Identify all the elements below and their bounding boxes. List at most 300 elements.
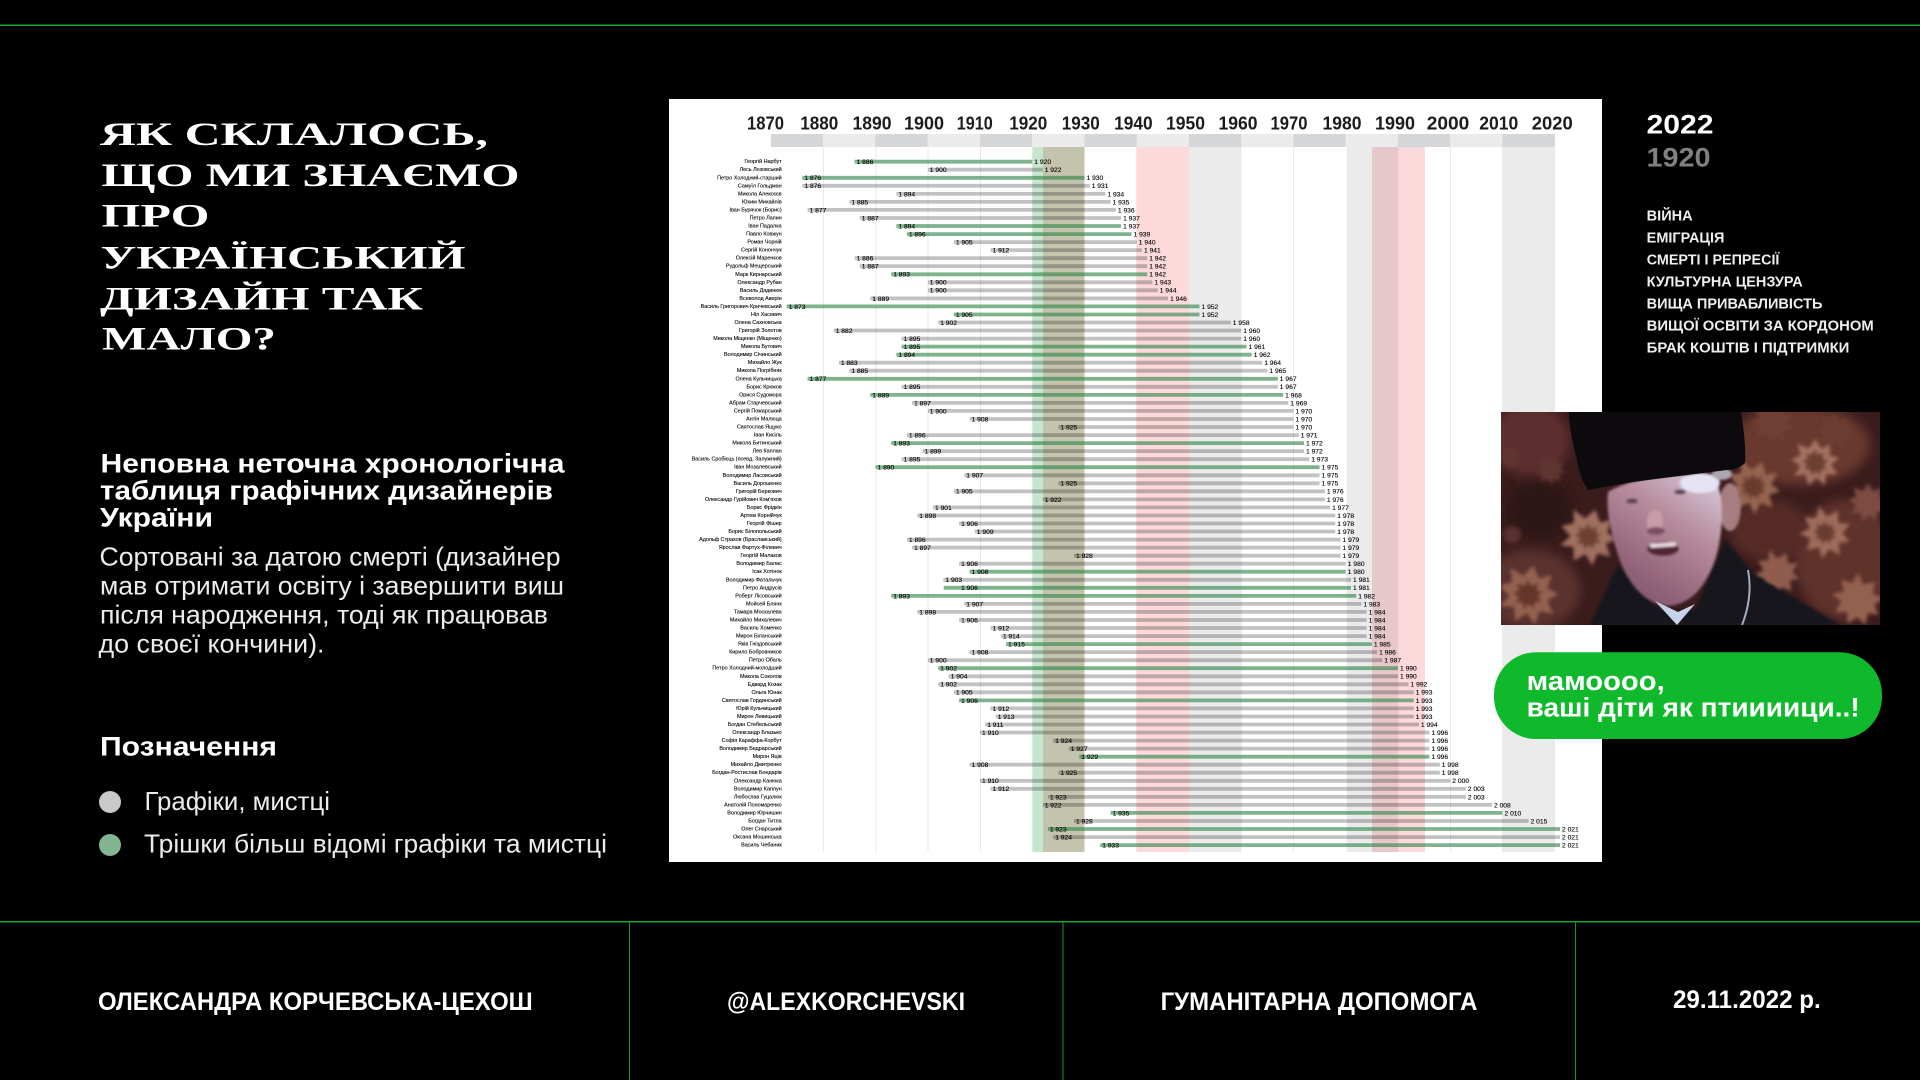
timeline rows: 1 906: [961, 561, 978, 568]
timeline rows: 1 902: [940, 666, 957, 673]
decade labels: 1920: [1009, 113, 1047, 134]
timeline rows: Іван Бурячок (Борис): [730, 207, 782, 213]
timeline rows: Святослав Гординський: [722, 697, 782, 704]
timeline rows: 1 970: [1296, 424, 1313, 431]
timeline rows: Олексій Маренков: [736, 255, 782, 262]
timeline rows: 1 903: [945, 577, 962, 584]
timeline rows: 1 973: [1311, 457, 1328, 464]
timeline rows: 1 924: [1055, 738, 1072, 745]
timeline rows: 1 931: [1092, 183, 1109, 190]
timeline rows: Юрій Кульчицький: [736, 705, 782, 712]
title: [100, 117, 520, 357]
timeline rows: Михайло Жук: [748, 359, 782, 366]
decade labels: 1900: [904, 113, 944, 134]
timeline rows: 2 010: [1504, 810, 1522, 817]
timeline rows: 1 905: [956, 312, 973, 319]
timeline rows: 2 003: [1468, 794, 1485, 801]
period band: 1980-1985: [1347, 147, 1372, 852]
timeline rows: 1 923: [1050, 794, 1067, 801]
photo: hat: [1569, 412, 1745, 490]
timeline rows: Орися Судомора: [739, 392, 782, 398]
timeline rows: 1 906: [961, 617, 978, 624]
timeline rows: 1 902: [940, 682, 957, 689]
chart panel: timeline of designers: [669, 99, 1602, 862]
timeline rows: Михайло Дмитренко: [731, 761, 782, 768]
legend: [99, 732, 607, 859]
timeline rows: Лев Каплан: [753, 449, 782, 455]
timeline rows: 1 985: [1374, 641, 1391, 648]
description text: [98, 542, 564, 659]
timeline rows: Святослав Ящуко: [737, 424, 782, 430]
timeline rows: 1 994: [1421, 722, 1438, 729]
list of causes: КУЛЬТУРНА ЦЕНЗУРА: [1647, 275, 1803, 291]
timeline rows: Богдан-Ростислав Бондарів: [712, 770, 782, 776]
timeline rows: 2 021: [1562, 826, 1579, 833]
timeline rows: 1 979: [1342, 545, 1360, 552]
timeline rows: 1 993: [1416, 706, 1433, 713]
timeline rows: 1 964: [1264, 360, 1281, 367]
timeline rows: 1 970: [1296, 416, 1313, 423]
timeline rows: 1 906: [961, 585, 978, 592]
timeline rows: 2 015: [1531, 818, 1548, 825]
timeline rows: 1 914: [1003, 633, 1020, 640]
timeline rows: 1 992: [1410, 682, 1428, 689]
timeline rows: 1 907: [966, 601, 983, 608]
title: МАЛО?: [102, 321, 276, 357]
timeline rows: Борис Фрідкін: [747, 505, 782, 511]
timeline rows: Петро Обаль: [749, 658, 782, 664]
timeline rows: Кирило Бобровников: [729, 650, 782, 656]
timeline rows: 1 876: [804, 183, 821, 190]
timeline rows: 1 978: [1337, 529, 1354, 536]
timeline rows: Микола Погрібняк: [737, 368, 782, 374]
timeline rows: 1 934: [1107, 191, 1124, 198]
timeline rows: 1 978: [1337, 513, 1354, 520]
subtitle heading: України: [100, 503, 213, 533]
timeline rows: 1 933: [1102, 842, 1119, 849]
timeline rows: 1 984: [1369, 617, 1386, 624]
decade labels: 2020: [1532, 113, 1573, 134]
footer: author: ОЛЕКСАНДРА КОРЧЕВСЬКА-ЦЕХОШ: [98, 988, 533, 1016]
timeline rows: Володимир Юрчишин: [727, 810, 782, 816]
timeline rows: 1 967: [1280, 384, 1297, 391]
timeline rows: Олександр Гурійович Ком'яхов: [705, 496, 782, 503]
timeline rows: 1 887: [862, 215, 879, 222]
timeline rows: 1 913: [998, 714, 1015, 721]
timeline rows: 1 981: [1353, 577, 1370, 584]
timeline rows: 1 958: [1233, 320, 1250, 327]
timeline rows: 1 980: [1348, 561, 1365, 568]
timeline rows: 1 912: [992, 625, 1010, 632]
footer: date: 29.11.2022 р.: [1673, 986, 1821, 1014]
timeline rows: 1 984: [1369, 609, 1386, 616]
timeline rows: 1 982: [1358, 593, 1375, 600]
timeline rows: 1 907: [966, 473, 983, 480]
timeline rows: 1 923: [1050, 826, 1067, 833]
timeline rows: 1 952: [1202, 304, 1219, 311]
timeline rows: 1 908: [972, 416, 989, 423]
list of causes: [1647, 207, 1874, 357]
timeline rows: 1 996: [1431, 754, 1448, 761]
timeline rows: Сергій Конончук: [741, 247, 782, 254]
timeline rows: 1 960: [1243, 336, 1260, 343]
decade labels: 1970: [1270, 113, 1308, 134]
timeline rows: 1 922: [1045, 802, 1062, 809]
timeline rows: 1 896: [909, 433, 926, 440]
timeline rows: Роман Чорній: [747, 239, 782, 246]
list of causes: СМЕРТІ І РЕПРЕСІЇ: [1647, 252, 1780, 269]
timeline rows: 2 021: [1562, 842, 1579, 849]
timeline rows: 1 922: [1045, 167, 1062, 174]
timeline rows: Микола Бутович: [741, 344, 782, 350]
timeline rows: 1 975: [1322, 465, 1339, 472]
timeline rows: 1 943: [1154, 280, 1171, 287]
timeline rows: 1 976: [1327, 497, 1344, 504]
timeline rows: 1 998: [1442, 770, 1459, 777]
timeline rows: Григорій Золотов: [739, 327, 782, 334]
timeline rows: 1 925: [1060, 424, 1077, 431]
timeline rows: 1 928: [1076, 553, 1093, 560]
timeline rows: Лесь Лозовський: [740, 166, 782, 173]
timeline rows: 1 889: [872, 392, 889, 399]
timeline rows: 1 873: [789, 304, 806, 311]
timeline rows: Петро Андрусів: [743, 585, 782, 591]
timeline rows: Едвард Козак: [748, 682, 782, 688]
timeline rows: Марк Кирнарський: [735, 271, 782, 278]
timeline rows: 1 990: [1400, 674, 1417, 681]
timeline rows: 1 887: [862, 264, 879, 271]
period band: 1985-1990: [1372, 147, 1399, 852]
timeline rows: 1 900: [930, 288, 947, 295]
timeline rows: 1 983: [1363, 601, 1380, 608]
timeline rows: 1 895: [904, 344, 921, 351]
timeline rows: 1 980: [1348, 569, 1365, 576]
timeline rows: Самуїл Гольдман: [738, 183, 782, 189]
timeline rows: 2 008: [1494, 802, 1511, 809]
timeline rows: Володимир Фатальчук: [726, 577, 782, 583]
decade labels: [747, 113, 1573, 134]
timeline rows: 1 925: [1060, 481, 1077, 488]
timeline rows: Борис Крюков: [746, 384, 782, 390]
timeline rows: Антін Малюца: [746, 416, 782, 422]
timeline rows: 1 965: [1269, 368, 1286, 375]
description text: Сортовані за датою смерті (дизайнер: [100, 542, 560, 572]
list of causes: ВІЙНА: [1647, 207, 1693, 225]
timeline rows: Григорій Беркович: [736, 488, 782, 495]
timeline rows: 1 897: [914, 545, 931, 552]
timeline rows: 1 897: [914, 400, 931, 407]
decade labels: 1870: [747, 113, 784, 134]
timeline rows: 1 993: [1416, 698, 1433, 705]
timeline rows: 1 882: [836, 328, 853, 335]
timeline rows: 1 876: [804, 175, 821, 182]
timeline rows: 1 961: [1248, 344, 1266, 351]
speech bubble: мамоооо,: [1527, 666, 1665, 696]
timeline rows: Георгій Фішер: [747, 520, 782, 527]
timeline rows: Ніл Хасевич: [751, 312, 782, 318]
timeline rows: Георгій Малаков: [740, 552, 782, 559]
list of causes: ЕМІГРАЦІЯ: [1647, 231, 1724, 247]
timeline rows: 1 972: [1306, 441, 1323, 448]
timeline rows: Василь Дядинюк: [740, 288, 782, 294]
decade labels: 1980: [1322, 113, 1362, 134]
timeline rows: 1 998: [1442, 762, 1459, 769]
timeline rows: 1 905: [956, 240, 973, 247]
timeline rows: 1 941: [1144, 248, 1161, 255]
timeline rows: Всеволод Аверін: [739, 296, 782, 302]
timeline rows: Володимир Січинський: [724, 351, 782, 358]
timeline rows: Володимир Бедрарський: [719, 745, 782, 752]
timeline rows: Іван Мозалевський: [734, 464, 782, 471]
timeline rows: 1 978: [1337, 521, 1354, 528]
timeline rows: 1 885: [851, 199, 868, 206]
footer: handle: @ALEXKORCHEVSKI: [727, 988, 965, 1016]
timeline rows: 1 906: [961, 698, 978, 705]
timeline rows: 1 996: [1431, 730, 1448, 737]
timeline rows: 1 981: [1353, 585, 1370, 592]
period band: 1922-1930: [1043, 147, 1084, 852]
timeline rows: 1 942: [1149, 272, 1166, 279]
timeline rows: 1 894: [898, 223, 915, 230]
timeline rows: 1 935: [1113, 810, 1130, 817]
title: УКРАЇНСЬКИЙ: [100, 239, 466, 276]
title: ЯК СКЛАЛОСЬ,: [100, 117, 488, 153]
speech bubble: [1494, 652, 1882, 739]
timeline rows: Юхим Михайлів: [742, 198, 782, 205]
timeline rows: 1 900: [930, 658, 947, 665]
legend label: grey: Графіки, мистці: [144, 786, 330, 816]
timeline rows: 1 895: [904, 384, 921, 391]
decade labels: 1880: [800, 113, 838, 134]
timeline rows: 1 889: [872, 296, 889, 303]
timeline rows: Оксана Мошинська: [733, 835, 782, 841]
timeline rows: 1 910: [982, 730, 999, 737]
decade labels: 2010: [1479, 113, 1518, 134]
photo: shirt collar: [1655, 601, 1695, 625]
legend dot: grey: [99, 791, 121, 813]
period band: 2010-2020: [1502, 147, 1555, 852]
timeline rows: Микола Соколов: [740, 674, 782, 680]
timeline rows: Павло Ковжун: [746, 232, 782, 238]
timeline rows: 1 912: [992, 248, 1010, 255]
timeline rows: Мирон Левицький: [737, 713, 782, 720]
timeline rows: 1 900: [930, 408, 947, 415]
timeline rows: 1 900: [930, 167, 947, 174]
timeline rows: Сергій Пожарський: [734, 407, 782, 414]
title: ЩО МИ ЗНАЄМО: [102, 158, 520, 194]
year comparison: 1920: [1646, 143, 1710, 173]
timeline rows: 1 942: [1149, 264, 1166, 271]
timeline rows: 1 908: [972, 569, 989, 576]
timeline rows: Мирон Біланський: [736, 633, 782, 640]
list of causes: ВИЩОЇ ОСВІТИ ЗА КОРДОНОМ: [1647, 318, 1874, 335]
timeline rows: 1 946: [1170, 296, 1187, 303]
timeline rows: 1 905: [956, 489, 973, 496]
timeline rows: 1 894: [898, 352, 915, 359]
timeline rows: 1 904: [951, 674, 968, 681]
timeline rows: 1 901: [935, 505, 952, 512]
timeline rows: Петро Лапин: [750, 216, 782, 222]
period band: 1920-1922: [1032, 147, 1043, 852]
timeline rows: Іван Падалка: [748, 224, 782, 230]
timeline rows: Адольф Страхов (Браславський): [699, 536, 782, 543]
timeline rows: 1 937: [1123, 215, 1140, 222]
timeline rows: 1 886: [857, 256, 874, 263]
subtitle heading: Неповна неточна хронологічна: [100, 449, 566, 479]
timeline rows: 1 976: [1327, 489, 1344, 496]
year comparison: [1646, 109, 1714, 173]
timeline rows: Богдан Стебельський: [728, 721, 782, 728]
timeline rows: 1 910: [982, 778, 999, 785]
speech bubble: ваші діти як птиииици..!: [1527, 693, 1860, 723]
timeline rows: Артем Корнійчук: [740, 512, 782, 519]
timeline rows: 1 967: [1280, 376, 1297, 383]
timeline rows: 1 984: [1369, 625, 1386, 632]
timeline rows: 1 898: [919, 609, 936, 616]
decade labels: 2000: [1427, 113, 1469, 134]
timeline rows: Ярослав Фартух-Філевич: [719, 545, 782, 551]
timeline rows: 1 952: [1202, 312, 1219, 319]
timeline rows: Олена Сахновська: [735, 320, 782, 326]
timeline rows: Ольга Юнак: [751, 690, 782, 696]
list of causes: БРАК КОШТІВ І ПІДТРИМКИ: [1647, 341, 1849, 357]
timeline rows: 1 996: [1431, 746, 1448, 753]
timeline rows: Петро Холодний-старший: [717, 174, 782, 181]
timeline rows: Олена Кульчицька: [735, 376, 782, 382]
timeline rows: 1 960: [1243, 328, 1260, 335]
timeline rows: 1 899: [924, 449, 942, 456]
timeline rows: Микола Алексєєв: [738, 191, 782, 197]
timeline rows: 1 893: [893, 272, 910, 279]
timeline rows: 1 902: [940, 320, 957, 327]
timeline rows: Олександр Рубан: [737, 280, 782, 286]
timeline rows: Мойсей Блянк: [746, 600, 782, 607]
timeline rows: 1 896: [909, 537, 926, 544]
timeline rows: 1 877: [810, 376, 827, 383]
timeline rows: Василь Дорошенко: [734, 481, 782, 487]
timeline rows: 1 944: [1160, 288, 1177, 295]
timeline rows: 1 975: [1322, 473, 1339, 480]
timeline rows: 1 975: [1322, 481, 1339, 488]
timeline rows: Мирон Яців: [753, 754, 782, 760]
timeline rows: 1 886: [857, 159, 874, 166]
timeline rows: Яків Гніздовський: [738, 641, 782, 648]
decade labels: 1960: [1218, 113, 1258, 134]
list of causes: ВИЩА ПРИВАБЛИВІСТЬ: [1647, 297, 1822, 313]
timeline rows: Петро Холодний-молодший: [712, 665, 782, 672]
timeline rows: 1 977: [1332, 505, 1349, 512]
timeline rows: Володимир Каплун: [734, 786, 782, 792]
timeline rows: Богдан Титла: [748, 818, 782, 824]
decade labels: 1930: [1062, 113, 1100, 134]
legend label: green: Трішки більш відомі графіки та мистці: [144, 829, 607, 859]
timeline rows: Ісак Хотінок: [752, 569, 782, 575]
timeline rows: 1 909: [977, 529, 994, 536]
timeline rows: 1 893: [893, 441, 910, 448]
photo: man in fur hat against floral carpet: [1501, 412, 1880, 625]
decade labels: 1950: [1166, 113, 1205, 134]
timeline rows: 1 968: [1285, 392, 1302, 399]
timeline rows: Рудольф Мещерський: [726, 263, 782, 270]
timeline rows: Абрам Старчевський: [729, 399, 782, 406]
timeline rows: 1 924: [1055, 834, 1072, 841]
decade labels: 1910: [957, 113, 993, 134]
description text: мав отримати освіту і завершити виш: [100, 570, 564, 600]
timeline rows: Василь Григорович Кричевський: [701, 303, 782, 310]
timeline rows: 1 942: [1149, 256, 1166, 263]
timeline rows: Володимир Балас: [736, 561, 782, 567]
timeline rows: 1 986: [1379, 649, 1396, 656]
timeline rows: 1 912: [992, 706, 1010, 713]
timeline rows: 1 894: [898, 191, 915, 198]
timeline rows: [692, 158, 1579, 849]
footer: organisation: ГУМАНІТАРНА ДОПОМОГА: [1161, 988, 1477, 1016]
year comparison: 2022: [1646, 109, 1714, 139]
timeline rows: 1 979: [1342, 537, 1360, 544]
timeline rows: 1 905: [956, 690, 973, 697]
timeline rows: 1 936: [1118, 207, 1135, 214]
timeline rows: 1 937: [1123, 223, 1140, 230]
subtitle heading: [100, 449, 566, 533]
timeline rows: 1 993: [1416, 690, 1433, 697]
timeline rows: Олександр Канюка: [734, 778, 782, 784]
subtitle heading: таблиця графічних дизайнерів: [100, 475, 553, 505]
timeline rows: Софія Караффа-Корбут: [722, 738, 782, 744]
timeline rows: 1 990: [1400, 666, 1417, 673]
timeline rows: 1 906: [961, 521, 978, 528]
period band: 1950-1960: [1190, 147, 1242, 852]
description text: до своєї кончини).: [98, 629, 324, 659]
photo: face: [1607, 468, 1741, 606]
timeline rows: 1 971: [1301, 433, 1318, 440]
timeline rows: 1 890: [878, 465, 895, 472]
timeline rows: 1 912: [992, 786, 1010, 793]
timeline rows: Анатолій Пономаренко: [724, 801, 782, 808]
decade labels: 1940: [1114, 113, 1153, 134]
timeline rows: 2 003: [1468, 786, 1485, 793]
timeline rows: 1 895: [904, 336, 921, 343]
timeline rows: 1 993: [1416, 714, 1433, 721]
timeline rows: 1 987: [1384, 658, 1401, 665]
timeline rows: 1 930: [1086, 175, 1104, 182]
timeline rows: 1 970: [1296, 408, 1313, 415]
timeline rows: 1 885: [851, 368, 868, 375]
timeline rows: Борис Білопольський: [728, 528, 782, 535]
timeline rows: 1 898: [919, 513, 936, 520]
timeline rows: 1 925: [1060, 770, 1077, 777]
photo: coat highlight: [1742, 570, 1750, 625]
timeline rows: 1 896: [909, 232, 926, 239]
timeline rows: Роберт Лісовський: [735, 592, 782, 599]
timeline rows: Георгій Нарбут: [744, 158, 782, 165]
period band: 1990-1995: [1399, 147, 1425, 852]
timeline rows: 1 908: [972, 649, 989, 656]
timeline rows: Василь Сробієць (псевд. Залужний): [692, 456, 782, 463]
title: ПРО: [102, 199, 210, 235]
decade header strip: [771, 134, 1555, 147]
timeline rows: 1 979: [1342, 553, 1360, 560]
photo: coat: [1590, 540, 1840, 625]
timeline rows: 1 962: [1254, 352, 1271, 359]
timeline rows: 1 911: [987, 722, 1004, 729]
timeline rows: Володимир Ласовський: [723, 472, 782, 479]
timeline rows: 1 908: [972, 762, 989, 769]
timeline rows: Тамара Москалева: [734, 609, 782, 615]
decade labels: 1990: [1375, 113, 1415, 134]
timeline rows: 1 920: [1034, 159, 1051, 166]
timeline rows: 1 939: [1134, 232, 1151, 239]
legend dot: green: [99, 834, 121, 856]
